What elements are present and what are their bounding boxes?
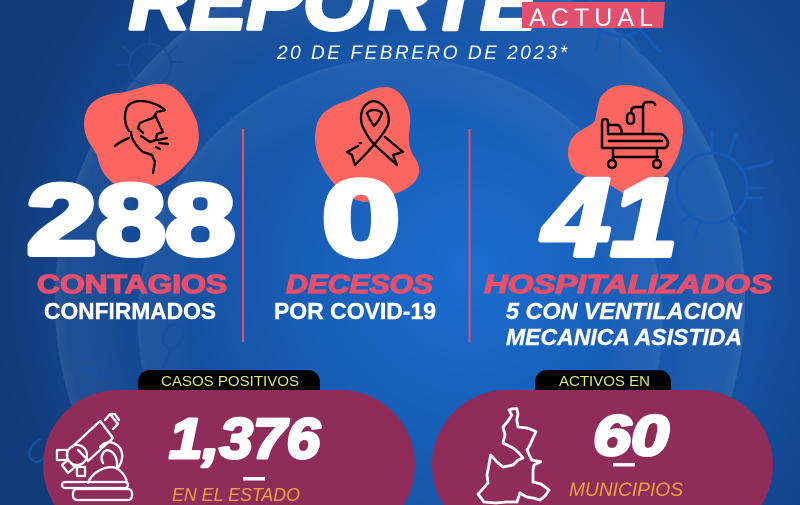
stat: decesos xyxy=(274,87,436,324)
blob xyxy=(84,84,199,188)
panel body xyxy=(432,390,773,505)
pill label: ACTIVOS EN xyxy=(559,373,650,390)
number: 0 xyxy=(322,158,400,278)
sublabel: CONFIRMADOS xyxy=(44,298,216,324)
date: 20 DE FEBRERO DE 2023* xyxy=(276,43,568,64)
number: 60 xyxy=(593,404,669,468)
panel: casos positivos xyxy=(43,370,415,505)
icon: state map xyxy=(478,408,549,503)
number: 1,376 xyxy=(169,407,320,471)
sublabel xyxy=(506,298,742,350)
label: MUNICIPIOS xyxy=(569,480,683,501)
stat: contagios xyxy=(27,84,235,324)
icon: ribbon xyxy=(347,101,403,165)
icon: hospital bed xyxy=(602,102,668,168)
pill label xyxy=(535,370,671,400)
panel body xyxy=(43,390,415,505)
icon: microscope xyxy=(57,414,132,500)
label: DECESOS xyxy=(286,269,434,299)
sublabel: MECANICA ASISTIDA xyxy=(506,324,742,350)
label: EN EL ESTADO xyxy=(172,484,300,505)
dash xyxy=(613,463,635,466)
dash xyxy=(243,477,265,480)
sublabel: POR COVID-19 xyxy=(274,298,436,324)
number: 288 xyxy=(27,164,235,275)
pill label xyxy=(138,370,320,400)
label: CONTAGIOS xyxy=(37,269,227,299)
stat: hospitalizados xyxy=(484,85,773,350)
pill label: CASOS POSITIVOS xyxy=(161,373,299,390)
blob xyxy=(315,87,419,202)
subtitle badge: actual: ACTUAL xyxy=(529,4,653,32)
label: HOSPITALIZADOS xyxy=(484,269,773,299)
sublabel: 5 CON VENTILACION xyxy=(506,298,742,324)
blob xyxy=(568,85,683,197)
dividers xyxy=(242,129,470,342)
panel: activos en xyxy=(432,370,773,505)
icon: coughing person xyxy=(115,101,168,173)
number: 41 xyxy=(541,156,678,280)
